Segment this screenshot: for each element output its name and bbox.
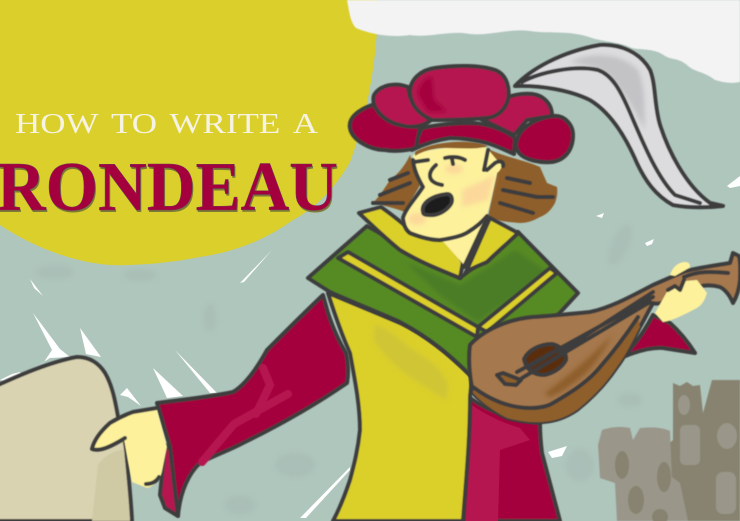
robe highlight — [465, 405, 530, 521]
hat left puff — [350, 105, 420, 151]
castle windows — [615, 451, 671, 521]
castle — [598, 380, 740, 521]
white wind streaks — [0, 176, 740, 518]
hat right front puff — [516, 116, 573, 162]
left red sleeve — [157, 295, 348, 516]
feather shading — [570, 55, 645, 130]
feather quill — [522, 68, 700, 203]
eyes — [414, 157, 465, 164]
right red cuff — [623, 315, 695, 357]
castle back tower — [640, 380, 740, 521]
left yellow stripe — [338, 252, 478, 337]
sound hole bars — [530, 350, 564, 372]
fretting hand — [655, 280, 707, 322]
sound hole — [524, 344, 566, 375]
white cloud — [347, 0, 740, 83]
lute — [469, 253, 740, 422]
title: how to write a: how to write a — [15, 97, 319, 142]
hat band — [412, 123, 515, 154]
bridge and strings — [497, 373, 521, 385]
hair — [373, 148, 557, 223]
lute rim — [473, 317, 640, 422]
pointing hand — [92, 408, 167, 488]
castle front wall — [598, 427, 688, 521]
thumb — [670, 262, 690, 276]
nose — [430, 165, 442, 185]
castle lighter patches — [678, 395, 737, 514]
rock shading — [92, 450, 130, 521]
mouth — [423, 194, 452, 215]
hat top puff — [410, 66, 509, 120]
yellow tunic — [328, 293, 472, 521]
hat far right puff — [478, 94, 552, 135]
lute shading — [545, 335, 612, 397]
neck — [440, 222, 486, 266]
face — [403, 142, 503, 240]
neck shadow — [668, 280, 684, 290]
yellow collar — [359, 207, 518, 278]
tunic shading — [374, 325, 448, 400]
ear — [487, 162, 503, 170]
rock — [0, 357, 132, 521]
hair strands — [373, 173, 553, 213]
lute body — [469, 253, 740, 422]
feather — [515, 45, 723, 207]
fringe — [415, 142, 488, 156]
sleeve highlight — [202, 368, 288, 462]
yellow sun disc — [0, 0, 378, 265]
cheek blush — [408, 164, 495, 225]
mantle shading — [405, 250, 548, 322]
hat — [350, 66, 573, 162]
green mantle — [308, 226, 578, 377]
right red robe panel — [462, 398, 560, 521]
background speckle smudges — [37, 222, 642, 514]
title: rondeau: RONDEAU — [0, 149, 338, 226]
top puff shading — [418, 76, 448, 112]
title: rondeau: RONDEAU — [0, 151, 339, 228]
hat second puff — [373, 85, 430, 127]
right yellow stripe — [478, 268, 557, 332]
